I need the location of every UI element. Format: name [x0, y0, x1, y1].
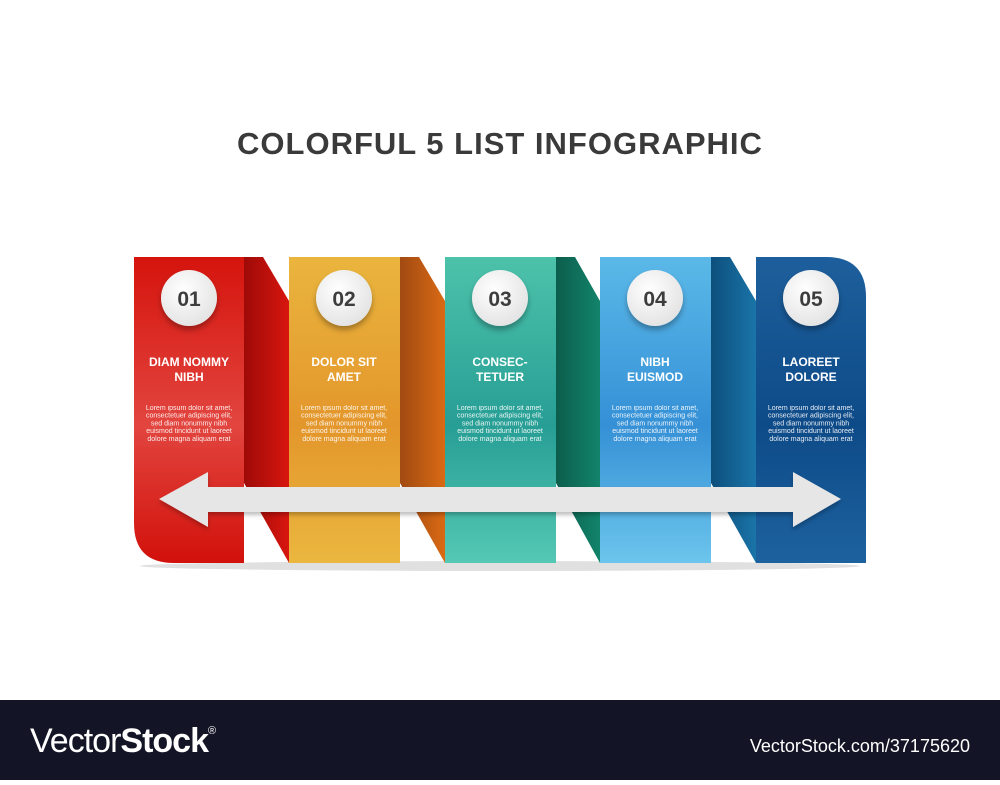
body 02: dolore magna aliquam erat: [302, 436, 386, 443]
body 04: dolore magna aliquam erat: [613, 436, 697, 443]
body 02: euismod tincidunt ut laoreet: [301, 428, 387, 435]
fold 4: [711, 257, 756, 563]
body 01: dolore magna aliquam erat: [147, 436, 231, 443]
body 04: consectetuer adipiscing elit,: [612, 413, 698, 420]
body 02: consectetuer adipiscing elit,: [301, 413, 387, 420]
panel 05: [756, 257, 866, 563]
panel 01: [134, 257, 244, 563]
body 03: consectetuer adipiscing elit,: [457, 413, 543, 420]
badge 02: [316, 270, 372, 326]
body 03: dolore magna aliquam erat: [458, 436, 542, 443]
body 04: sed diam nonummy nibh: [617, 420, 693, 427]
heading 04: NIBH: [640, 355, 670, 369]
shadow under bands: [140, 561, 860, 571]
panel 03: 03: [488, 288, 512, 311]
footer logo: VectorStock: [30, 722, 208, 760]
body 03: sed diam nonummy nibh: [462, 420, 538, 427]
body 05: sed diam nonummy nibh: [773, 420, 849, 427]
panel 02: [289, 257, 400, 563]
body 01: Lorem ipsum dolor sit amet,: [146, 405, 232, 412]
badge 05: [783, 270, 839, 326]
panel 02: 02: [332, 288, 356, 311]
heading 03: CONSEC-: [472, 355, 528, 369]
panel 04: [600, 257, 711, 563]
body 01: consectetuer adipiscing elit,: [146, 413, 232, 420]
panel 04: 04: [643, 288, 667, 311]
fold 1: [244, 257, 289, 563]
arrow: double-headed: [159, 472, 841, 527]
panel 05: 05: [799, 288, 823, 311]
fold 2: [400, 257, 445, 563]
body 03: Lorem ipsum dolor sit amet,: [457, 405, 543, 412]
body 01: sed diam nonummy nibh: [151, 420, 227, 427]
body 02: Lorem ipsum dolor sit amet,: [301, 405, 387, 412]
heading 03: TETUER: [476, 370, 524, 384]
footer bar: [0, 700, 1000, 780]
heading 01: DIAM NOMMY: [149, 355, 229, 369]
panel 01: 01: [177, 288, 201, 311]
heading 01: NIBH: [174, 370, 204, 384]
body 05: consectetuer adipiscing elit,: [768, 413, 854, 420]
panel 03: [445, 257, 556, 563]
badge 01: [161, 270, 217, 326]
heading 05: DOLORE: [785, 370, 837, 384]
badge 03: [472, 270, 528, 326]
heading 02: DOLOR SIT: [311, 355, 377, 369]
heading 04: EUISMOD: [627, 370, 683, 384]
body 04: euismod tincidunt ut laoreet: [612, 428, 698, 435]
footer url: VectorStock.com/37175620: [750, 736, 970, 756]
heading 02: AMET: [327, 370, 362, 384]
footer logo: ®: [208, 725, 216, 737]
heading 05: LAOREET: [782, 355, 840, 369]
body 05: dolore magna aliquam erat: [769, 436, 853, 443]
body 03: euismod tincidunt ut laoreet: [457, 428, 543, 435]
body 01: euismod tincidunt ut laoreet: [146, 428, 232, 435]
badge 04: [627, 270, 683, 326]
body 04: Lorem ipsum dolor sit amet,: [612, 405, 698, 412]
body 05: Lorem ipsum dolor sit amet,: [768, 405, 854, 412]
body 02: sed diam nonummy nibh: [306, 420, 382, 427]
title: COLORFUL 5 LIST INFOGRAPHIC: [237, 126, 763, 161]
fold 3: [556, 257, 600, 563]
body 05: euismod tincidunt ut laoreet: [768, 428, 854, 435]
